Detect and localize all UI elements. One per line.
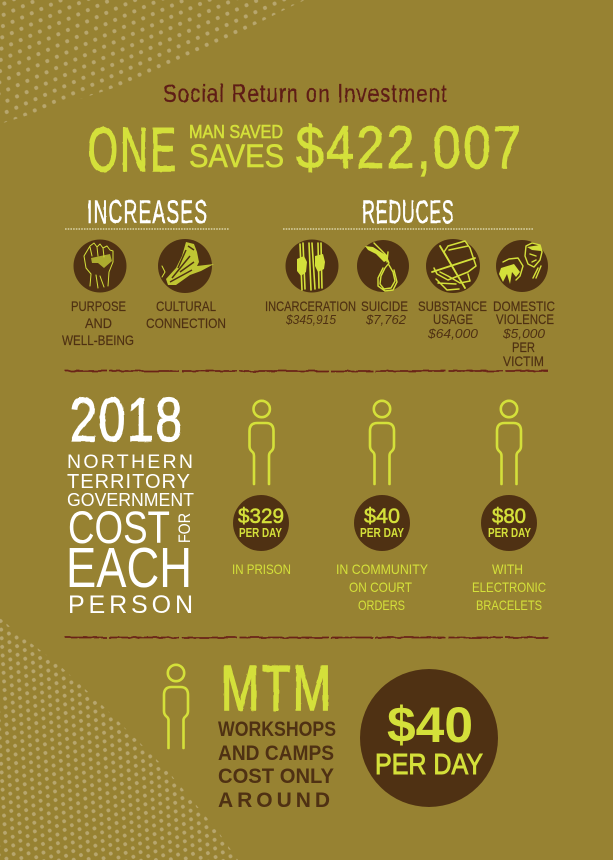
label: domestic violence $5,000 per victim: VIOLENCE — [496, 311, 554, 327]
cost badge: $40 per day, large: PER DAY — [375, 749, 483, 781]
cost badge: $329 per day: $329 — [238, 505, 284, 528]
heading: increases: INCREASES — [87, 194, 207, 230]
panel: 2018 government cost title: GOVERNMENT — [67, 489, 194, 510]
heading: reduces: REDUCES — [362, 196, 454, 230]
label: cultural connection: CULTURAL — [156, 298, 216, 314]
icon: cultural connection figure — [158, 239, 214, 293]
icon: person, prison — [250, 401, 274, 484]
cost badge: $40 per day: PER DAY — [360, 526, 405, 540]
label: incarceration $345,915: $345,915 — [285, 312, 337, 327]
cost badge: $329 per day: PER DAY — [239, 526, 283, 540]
label: incarceration $345,915: INCARCERATION — [265, 298, 356, 314]
cost badge: $40 per day, large: $40 — [387, 697, 473, 753]
label: purpose and well-being: WELL-BEING — [62, 332, 134, 348]
caption: with electronic bracelets: BRACELETS — [476, 597, 542, 613]
cost badge: $80 per day — [481, 495, 537, 551]
cost badge: $329 per day — [233, 495, 289, 551]
headline: one man saved saves $422,007 — [88, 114, 521, 184]
word COST: COST — [68, 502, 170, 553]
icon: noose — [357, 240, 409, 292]
panel: 2018 government cost title — [66, 385, 194, 619]
label: substance usage $64,000 — [418, 298, 487, 341]
panel: 2018 government cost title: TERRITORY — [67, 471, 190, 493]
heading: MTM: MTM — [221, 653, 331, 724]
cost badge: $40 per day — [354, 495, 410, 551]
text: workshops and camps cost only around: AND CAMPS — [218, 742, 334, 765]
text: workshops and camps cost only around: COST ONLY — [218, 765, 334, 788]
dotted pattern: top left — [0, 0, 305, 124]
caption: in community on court orders: ORDERS — [358, 597, 405, 613]
label: domestic violence $5,000 per victim — [493, 298, 555, 369]
label: domestic violence $5,000 per victim: $5,000 — [502, 326, 546, 341]
caption: in community on court orders: ON COURT — [349, 579, 412, 595]
label: domestic violence $5,000 per victim: DOMESTIC — [493, 298, 555, 314]
words: Northern Territory Government: NORTHERN — [67, 451, 193, 473]
headline amount: $422,007 — [296, 114, 521, 181]
icon: prison bars and hands — [286, 240, 338, 292]
label: substance usage $64,000: SUBSTANCE — [418, 298, 487, 314]
caption: with electronic bracelets: ELECTRONIC — [472, 579, 546, 595]
word FOR, rotated: FOR — [175, 513, 194, 543]
label: domestic violence $5,000 per victim: VICTIM — [503, 353, 544, 369]
word PERSON: PERSON — [68, 591, 193, 619]
icon: person, MTM — [164, 665, 188, 748]
label: suicide $7,762: $7,762 — [365, 312, 407, 327]
caption: with electronic bracelets — [472, 561, 546, 613]
cost badge: $80 per day: PER DAY — [488, 526, 532, 540]
caption: in prison: IN PRISON — [232, 561, 291, 577]
headline word SAVES: SAVES — [189, 138, 284, 174]
label: purpose and well-being — [62, 298, 134, 348]
text: workshops and camps cost only around — [218, 718, 336, 812]
label: substance usage $64,000: USAGE — [433, 311, 473, 327]
icon: person, electronic bracelets — [497, 401, 521, 484]
headline words MAN SAVED: MAN SAVED — [189, 122, 283, 142]
label: purpose and well-being: PURPOSE — [71, 298, 126, 314]
icon: person, community — [370, 401, 394, 484]
text: workshops and camps cost only around: WORKSHOPS — [218, 718, 336, 741]
cost badge: $40 per day: $40 — [364, 505, 400, 528]
icon: crossed-out can — [426, 239, 480, 293]
cost badge: $40 per day, large — [360, 669, 498, 807]
caption: with electronic bracelets: WITH — [492, 561, 523, 577]
subtitle: Social Return on Investment: Social Return on Investment — [163, 79, 447, 107]
label: suicide $7,762: SUICIDE — [361, 298, 408, 314]
label: domestic violence $5,000 per victim: PER — [512, 339, 535, 355]
icon: raised fist — [74, 240, 126, 292]
dotted pattern: bottom left — [0, 618, 238, 860]
caption: in community on court orders — [336, 561, 429, 613]
caption: in community on court orders: IN COMMUNITY — [336, 561, 429, 577]
label: incarceration $345,915 — [265, 298, 356, 327]
label: cultural connection: CONNECTION — [146, 315, 226, 331]
label: cultural connection — [146, 298, 226, 331]
headline word ONE: ONE — [88, 115, 176, 184]
word EACH: EACH — [66, 536, 192, 600]
text: workshops and camps cost only around: AROUND — [218, 789, 330, 812]
label: substance usage $64,000: $64,000 — [427, 326, 479, 341]
label: suicide $7,762 — [361, 298, 408, 327]
cost badge: $80 per day: $80 — [492, 505, 526, 528]
icon: domestic violence figures — [496, 240, 548, 292]
label: purpose and well-being: AND — [85, 315, 112, 331]
year 2018: 2018 — [70, 385, 182, 454]
